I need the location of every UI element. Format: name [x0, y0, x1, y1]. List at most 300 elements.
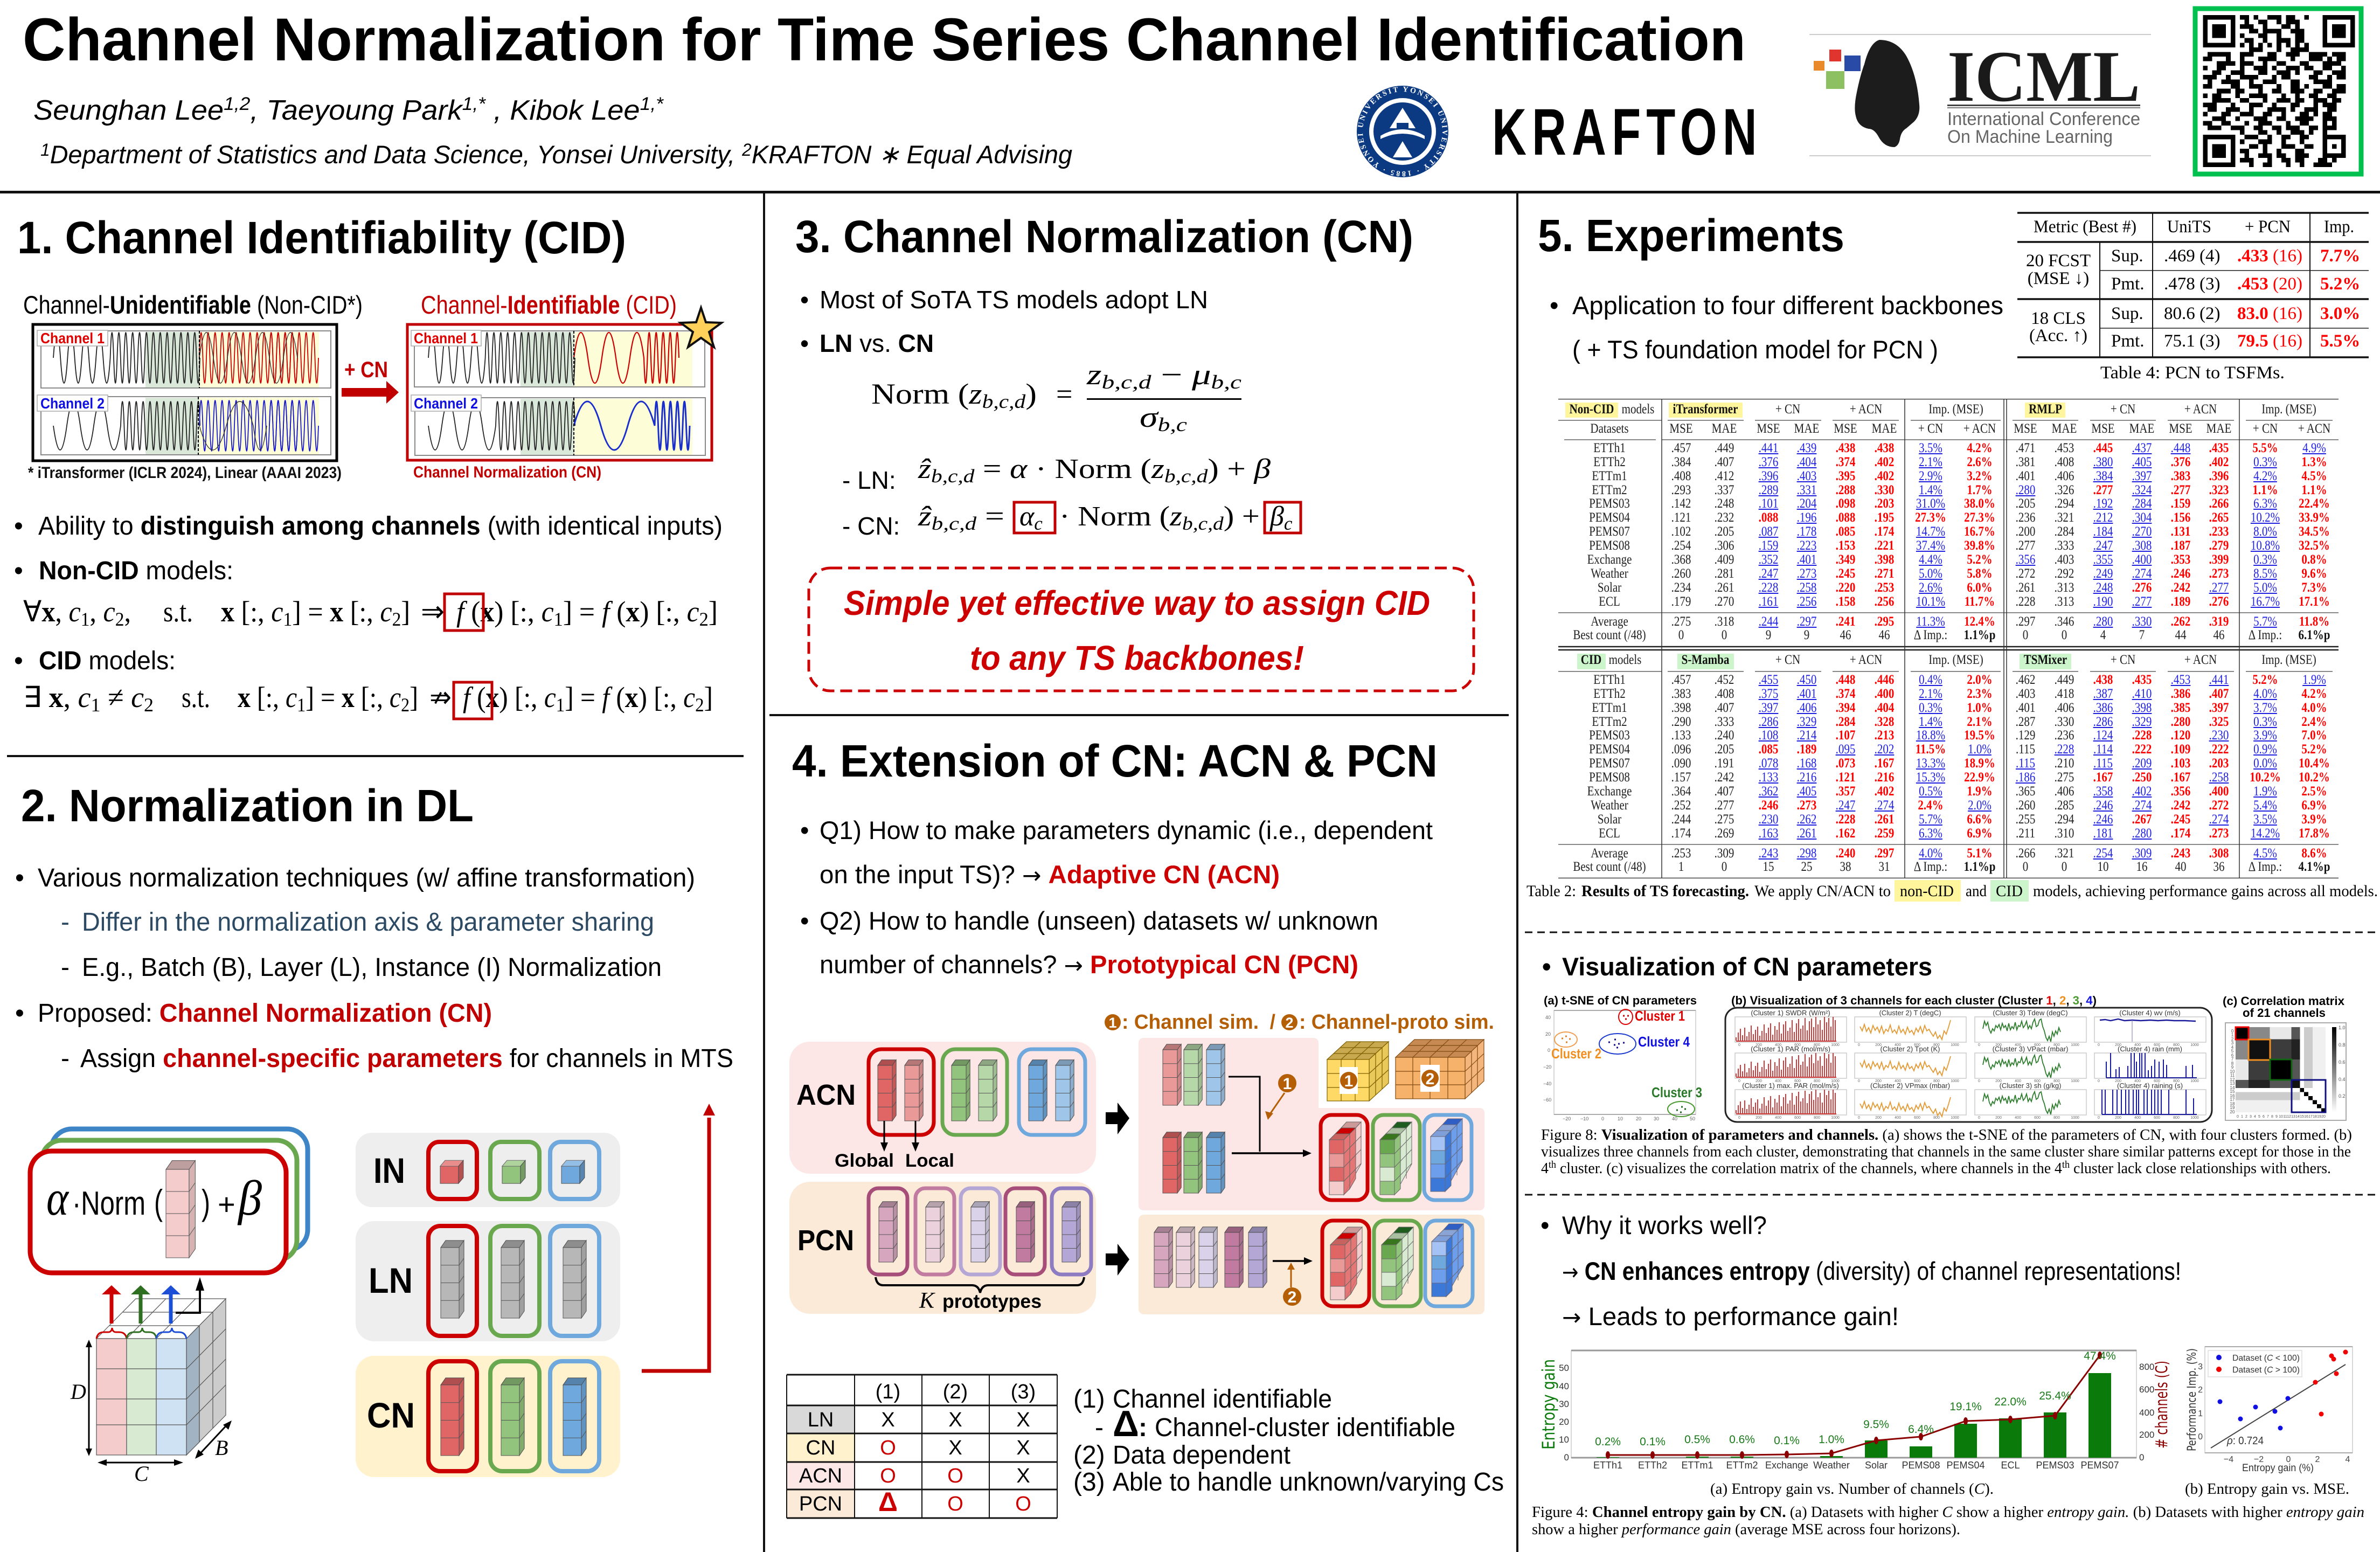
- CID data rows: .157: [1671, 770, 1691, 785]
- CID data rows: .321: [2055, 846, 2074, 861]
- chart: entropy gain vs channels: ETTh2: [1638, 1460, 1667, 1471]
- caption: table 2: non-CID: [1900, 882, 1954, 900]
- chart: entropy gain vs channels: 800: [2139, 1362, 2154, 1372]
- formula: LN: α · Norm ( z: [1010, 454, 1162, 484]
- heading 1: 1. Channel Identifiability (CID): [17, 212, 626, 263]
- formula: CID: ≠: [100, 681, 131, 713]
- affiliations: Department of Statistics and Data Science, Yonsei University,: [50, 140, 742, 169]
- formula: Norm: ): [1025, 378, 1037, 410]
- bullet: various techniques: Various normalization techniques (w/ affine transformation): [38, 864, 695, 892]
- CID data rows: 18.8%: [1916, 728, 1945, 743]
- chart: non-CID waveforms: Channel 2: [40, 395, 105, 412]
- non-CID data rows: PEMS04: [1589, 510, 1630, 525]
- CID data rows: .455: [1759, 673, 1778, 687]
- formula: CN: [918, 501, 1301, 534]
- non-CID data rows: .352: [1759, 552, 1778, 567]
- CID data rows: .242: [1715, 770, 1734, 785]
- non-CID data rows: 17.1%: [2299, 594, 2330, 609]
- CID data rows: .203: [2209, 756, 2229, 771]
- non-CID data rows: .368: [1671, 552, 1691, 567]
- CID data rows: .404: [1875, 701, 1894, 715]
- CID data rows: .410: [2132, 687, 2152, 701]
- CID data rows: .438: [2093, 673, 2113, 687]
- legend: similarity: [1105, 1011, 1494, 1034]
- heading 4: 4. Extension of CN: ACN & PCN: [792, 736, 1438, 786]
- CID data rows: .298: [1797, 846, 1816, 861]
- CID data rows: .401: [2016, 701, 2035, 715]
- formula: Norm: b,c,d: [982, 391, 1026, 412]
- non-CID data rows: 3.5%: [1919, 441, 1942, 455]
- CID data rows: .405: [1797, 784, 1816, 799]
- non-CID data rows: .384: [1671, 455, 1691, 469]
- sub-header row: MSE: [2014, 421, 2037, 436]
- non-CID data rows: .288: [1836, 483, 1855, 497]
- non-CID data rows: .277: [2016, 538, 2035, 553]
- CID data rows: .096: [1671, 742, 1691, 757]
- logo: ICML: [1809, 34, 2151, 156]
- table: method comparison: X: [881, 1409, 895, 1431]
- non-CID data rows: 11.7%: [1965, 594, 1995, 609]
- non-CID data rows: .190: [2093, 594, 2113, 609]
- non-CID data rows: .253: [1875, 580, 1894, 595]
- non-CID data rows: 10.2%: [2251, 510, 2280, 525]
- CID data rows: .274: [2132, 798, 2152, 813]
- chart: entropy gain vs MSE scatter: Dataset (C < 100): [2232, 1354, 2300, 1363]
- CID data rows: .109: [2171, 742, 2190, 757]
- CID data rows: .211: [2016, 826, 2035, 841]
- non-CID data rows: .262: [2171, 614, 2190, 629]
- bullet: why it works: Why it works well?: [1562, 1211, 1767, 1239]
- label: CID: Channel-Identifiable (CID): [421, 290, 677, 319]
- CID data rows: .273: [1797, 798, 1816, 813]
- legend: comparison criteria: -: [1095, 1414, 1104, 1442]
- chart: channels by cluster: (Cluster 4) raining (s): [2117, 1082, 2183, 1090]
- CID data rows: .280: [2132, 826, 2152, 841]
- table: method comparison: LN: [808, 1409, 834, 1431]
- bullet: why it works: •: [1541, 1211, 1549, 1239]
- non-CID data rows: .381: [2016, 455, 2035, 469]
- non-CID data rows: ETTm2: [1592, 483, 1627, 497]
- CID data rows: 2.0%: [1968, 798, 1992, 813]
- CID data rows: .329: [2132, 715, 2152, 729]
- non-CID data rows: 2.1%: [1919, 455, 1942, 469]
- chart: correlation matrix: 14: [2230, 1085, 2235, 1090]
- non-CID data rows: 6.0%: [1967, 580, 1993, 595]
- non-CID data rows: .234: [1671, 580, 1691, 595]
- chart: entropy gain vs channels: 1.0%: [1819, 1433, 1844, 1446]
- CID data rows: PEMS04: [1589, 742, 1630, 757]
- chart: entropy gain vs channels: 0: [2139, 1452, 2144, 1463]
- panel: PCN: [789, 1182, 1096, 1314]
- CID data rows: .448: [1836, 673, 1855, 687]
- CID data rows: Best count (/48): [1573, 860, 1646, 874]
- non-CID data rows: .258: [1797, 580, 1816, 595]
- table 4: + PCN: [2245, 217, 2291, 237]
- chart: correlation matrix: 15: [2300, 1115, 2304, 1119]
- formula: non-CID: 1: [554, 608, 563, 630]
- panel: IN: IN: [373, 1151, 405, 1190]
- formula: non-CID: ∀x, c: [23, 595, 81, 628]
- formula: CID: 1: [91, 694, 100, 716]
- non-CID data rows: .273: [1797, 566, 1816, 581]
- non-CID data rows: Exchange: [1587, 552, 1632, 567]
- header groups: CID: + CN: [2111, 653, 2135, 667]
- cube dimension labels: D: [70, 1380, 86, 1404]
- non-CID data rows: .408: [2055, 455, 2074, 469]
- footnote: CN: Channel Normalization (CN): [413, 463, 601, 481]
- table: method comparison: X: [948, 1437, 962, 1459]
- CID data rows: .450: [1797, 673, 1816, 687]
- non-CID data rows: Weather: [1591, 566, 1628, 581]
- CID data rows: 25: [1801, 860, 1813, 874]
- formula: Norm: b,c: [1211, 371, 1241, 393]
- panel: LN: [356, 1221, 620, 1341]
- chart: correlation matrix: 12: [2230, 1077, 2235, 1082]
- non-CID data rows: 46: [1878, 628, 1890, 642]
- chart: t-SNE: 30: [1654, 1116, 1659, 1121]
- header groups: CID: [1581, 653, 2316, 667]
- CID data rows: Weather: [1591, 798, 1628, 813]
- chart: t-SNE: 40: [1545, 1015, 1551, 1020]
- non-CID data rows: 2.9%: [1919, 469, 1942, 483]
- non-CID data rows: PEMS08: [1589, 538, 1630, 553]
- formula: CID: ] =: [565, 681, 602, 713]
- footnote: non-CID models: * iTransformer (ICLR 2024), Linear (AAAI 2023): [28, 464, 342, 482]
- table 2: results of TS forecasting: [1558, 399, 2339, 878]
- chart: entropy gain vs channels: 6.4%: [1908, 1423, 1934, 1436]
- formula: CID: s.t.: [182, 681, 210, 713]
- formula: non-CID: f (x) [:, c: [456, 595, 554, 628]
- table 4: .469 (4): [2164, 246, 2220, 266]
- sub-bullet: assign parameters: Assign channel-specific parameters for channels in MTS: [80, 1044, 733, 1073]
- caption: figure 4: Figure 4: Channel entropy gain by CN. (a) Datasets with higher C show a higher entropy gain. (b) Datasets with higher entropy gain: [1532, 1504, 2364, 1521]
- non-CID data rows: .276: [2132, 580, 2152, 595]
- CID data rows: .167: [2093, 770, 2113, 785]
- non-CID data rows: .187: [2171, 538, 2190, 553]
- chart: correlation matrix: 12: [2287, 1115, 2291, 1119]
- bullet: LN vs CN: LN: [820, 329, 852, 357]
- sub-header row: MSE: [1669, 421, 1693, 436]
- chart: entropy gain vs channels: Weather: [1813, 1460, 1850, 1471]
- bullet: proposed: Proposed: Channel Normalization (CN): [38, 999, 492, 1028]
- CID data rows: 4.0%: [1919, 846, 1942, 861]
- non-CID data rows: .297: [2016, 614, 2035, 629]
- legend: similarity: : Channel sim. /: [1122, 1011, 1275, 1034]
- formula: CN: · Norm ( z: [1059, 501, 1181, 532]
- bullet: LN vs CN: •: [800, 329, 809, 357]
- panel: ACN: Local: [905, 1151, 954, 1171]
- non-CID data rows: .203: [1875, 496, 1894, 511]
- chart: correlation matrix: 14: [2295, 1115, 2300, 1119]
- non-CID data rows: 5.7%: [2253, 614, 2277, 629]
- non-CID data rows: 38.0%: [1964, 496, 1995, 511]
- CID data rows: .400: [2209, 784, 2229, 799]
- CID data rows: 2.4%: [2301, 715, 2327, 729]
- authors: , Taeyoung Park: [250, 95, 464, 126]
- chart: t-SNE: −20: [1563, 1116, 1571, 1121]
- chart: correlation matrix: of 21 channels: [2243, 1006, 2326, 1020]
- bullet: Q2: •: [800, 906, 809, 935]
- chart: correlation matrix: 20: [2321, 1115, 2326, 1119]
- header groups: CID: Imp. (MSE): [1928, 653, 1983, 667]
- chart: CID waveforms: Channel 1: [414, 330, 478, 347]
- CID data rows: 2.0%: [1967, 673, 1993, 687]
- CID data rows: .397: [1759, 701, 1778, 715]
- CID data rows: .216: [1875, 770, 1894, 785]
- CID data rows: .262: [1797, 812, 1816, 827]
- formula: CID: •: [14, 647, 23, 675]
- CID data rows: .213: [1875, 728, 1894, 743]
- legend: comparison criteria: Data dependent: [1113, 1441, 1290, 1470]
- CID data rows: .124: [2093, 728, 2113, 743]
- chart: entropy gain vs MSE scatter: 3: [2198, 1362, 2203, 1371]
- arrow: ACN to detail: [1106, 1103, 1129, 1134]
- non-CID data rows: 4.2%: [2253, 469, 2277, 483]
- CID data rows: .297: [1875, 846, 1894, 861]
- chart: entropy gain vs channels: 20: [1559, 1417, 1569, 1427]
- non-CID data rows: .274: [2132, 566, 2152, 581]
- chart: correlation matrix: 4: [2231, 1045, 2234, 1050]
- cube dimension labels: C: [134, 1461, 149, 1486]
- chart: t-SNE: 20: [1545, 1031, 1551, 1037]
- chart: correlation matrix: 0.4: [2339, 1077, 2346, 1082]
- non-CID data rows: .277: [2093, 483, 2113, 497]
- non-CID data rows: 11.3%: [1916, 614, 1945, 629]
- bullet: CID models: CID models:: [39, 647, 176, 675]
- legend: comparison criteria: (3): [1073, 1468, 1105, 1496]
- non-CID data rows: 1.3%: [2301, 455, 2327, 469]
- formula: non-CID: f (x) [:, c: [602, 595, 700, 628]
- CID data rows: 15: [1763, 860, 1774, 874]
- bullet: backbones: •: [1550, 291, 1558, 320]
- label: LN: - LN:: [842, 466, 896, 494]
- table 4: (MSE ↓): [2028, 269, 2089, 288]
- non-CID data rows: .445: [2093, 441, 2113, 455]
- non-CID data rows: .294: [2055, 496, 2074, 511]
- CID data rows: .260: [2016, 798, 2035, 813]
- non-CID data rows: .353: [2171, 552, 2190, 567]
- table: method comparison: PCN: [799, 1493, 842, 1515]
- header groups: CID: S-Mamba: [1682, 653, 1729, 667]
- caption: figure 4: show a higher performance gain (average MSE across four horizons).: [1532, 1521, 1960, 1538]
- non-CID data rows: .441: [1759, 441, 1778, 455]
- chart: entropy gain vs MSE scatter: 4: [2346, 1455, 2350, 1464]
- non-CID data rows: .396: [2209, 469, 2229, 483]
- CID data rows: .285: [2055, 798, 2074, 813]
- CID data rows: .259: [1875, 826, 1894, 841]
- non-CID data rows: 7.3%: [2301, 580, 2327, 595]
- CID data rows: .310: [2055, 826, 2074, 841]
- non-CID data rows: .102: [1671, 524, 1691, 539]
- CID data rows: 10: [2097, 860, 2109, 874]
- non-CID data rows: .448: [2171, 441, 2190, 455]
- CID data rows: .202: [1875, 742, 1894, 757]
- CID data rows: 2.1%: [1919, 687, 1942, 701]
- non-CID data rows: 0: [2023, 628, 2028, 642]
- non-CID data rows: 27.3%: [1964, 510, 1995, 525]
- sub-header row: MSE: [2091, 421, 2115, 436]
- CID data rows: 1.4%: [1919, 715, 1942, 729]
- non-CID data rows: .457: [1671, 441, 1691, 455]
- affiliations: 1: [40, 140, 50, 160]
- non-CID data rows: 6.1%p: [2299, 628, 2330, 642]
- chart: channels by cluster: (Cluster 4) wv (m/s): [2119, 1009, 2181, 1017]
- chart: channels by cluster: (Cluster 2) T (degC): [1879, 1009, 1941, 1017]
- chart: correlation matrix: 8: [2231, 1061, 2234, 1066]
- non-CID data rows: .284: [2132, 496, 2152, 511]
- heading: visualization of CN parameters: Visualization of CN parameters: [1562, 952, 1932, 981]
- non-CID data rows: Δ Imp.:: [2249, 628, 2282, 642]
- CID data rows: 17.8%: [2299, 826, 2330, 841]
- non-CID data rows: .244: [1759, 614, 1778, 629]
- non-CID data rows: .402: [1875, 469, 1894, 483]
- CID data rows: .073: [1836, 756, 1855, 771]
- sub-header row: MSE: [1757, 421, 1780, 436]
- legend: comparison criteria: [1073, 1385, 1504, 1496]
- CID data rows: .243: [1759, 846, 1778, 861]
- bullet: non-CID models: Non-CID models:: [39, 557, 233, 585]
- chart: correlation matrix: 5: [2258, 1115, 2260, 1119]
- non-CID data rows: 9: [1804, 628, 1809, 642]
- non-CID data rows: 4.9%: [2302, 441, 2326, 455]
- CID data rows: .129: [2016, 728, 2035, 743]
- non-CID data rows: .161: [1759, 594, 1778, 609]
- non-CID data rows: .121: [1671, 510, 1691, 525]
- CID data rows: .133: [1759, 770, 1778, 785]
- heading 3: 3. Channel Normalization (CN): [795, 211, 1413, 262]
- chart: correlation matrix: 11: [2230, 1073, 2235, 1078]
- label: CN: - CN:: [842, 512, 900, 540]
- table 4: Sup.: [2111, 246, 2143, 266]
- non-CID data rows: .399: [2209, 552, 2229, 567]
- chart: t-SNE: 0: [1548, 1048, 1550, 1053]
- non-CID data rows: 12.4%: [1964, 614, 1995, 629]
- bullet: various techniques: •: [15, 864, 24, 892]
- non-CID data rows: .249: [2093, 566, 2113, 581]
- non-CID data rows: .453: [2055, 441, 2074, 455]
- chart: non-CID waveforms: Channel 1: [40, 330, 105, 347]
- legend: comparison criteria: Channel-cluster identifiable: [1155, 1414, 1455, 1442]
- CID data rows: .418: [2055, 687, 2074, 701]
- chart: t-SNE: 0: [1601, 1116, 1604, 1121]
- CID data rows: .308: [2209, 846, 2229, 861]
- CID data rows: .162: [1836, 826, 1855, 841]
- CID data rows: PEMS07: [1589, 756, 1630, 771]
- non-CID data rows: .179: [1671, 594, 1691, 609]
- non-CID data rows: .409: [1715, 552, 1734, 567]
- formula: non-CID: ⇒: [421, 595, 445, 628]
- CID data rows: .174: [1671, 826, 1691, 841]
- sub-bullet: examples: -: [61, 953, 70, 982]
- bullet dot: proposed: •: [15, 999, 24, 1028]
- formula: non-CID: ,: [124, 595, 131, 628]
- CID data rows: 22.9%: [1964, 770, 1995, 785]
- table: method comparison: O: [880, 1465, 896, 1487]
- non-CID data rows: .437: [2132, 441, 2152, 455]
- logo: KRAFTON: KRAFTON: [1492, 95, 1763, 169]
- non-CID data rows: .333: [2055, 538, 2074, 553]
- table: method comparison: X: [1016, 1465, 1030, 1487]
- caption: subfigure a: (a) Entropy gain vs. Number of channels (C).: [1710, 1480, 1994, 1498]
- chart: correlation matrix: 3: [2250, 1115, 2252, 1119]
- header groups: non-CID: iTransformer: [1673, 402, 1738, 417]
- CID data rows: 40: [2175, 860, 2187, 874]
- non-CID data rows: .331: [1797, 483, 1816, 497]
- sub-header row: MSE: [1834, 421, 1857, 436]
- chart: entropy gain vs MSE scatter: [2185, 1347, 2353, 1474]
- arrow: + CN: + CN: [344, 357, 388, 382]
- non-CID data rows: .266: [2209, 496, 2229, 511]
- diagram: norm cards: [30, 1129, 308, 1273]
- formula: non-CID: 2: [699, 608, 709, 630]
- chart: entropy gain vs MSE scatter: Dataset (C > 100): [2232, 1366, 2300, 1375]
- non-CID data rows: [1573, 441, 2330, 642]
- caption: table 4: Table 4: PCN to TSFMs.: [2100, 363, 2285, 383]
- legend: similarity: : Channel-proto sim.: [1299, 1011, 1494, 1034]
- CID data rows: .191: [1715, 756, 1734, 771]
- bullet: backbones: Application to four different backbones: [1572, 291, 2003, 320]
- callout: simple yet effective: [809, 568, 1474, 691]
- non-CID data rows: .355: [2093, 552, 2113, 567]
- non-CID data rows: .241: [1836, 614, 1855, 629]
- non-CID data rows: .402: [2209, 455, 2229, 469]
- CID data rows: 7.0%: [2301, 728, 2327, 743]
- formula: CN: b,c,d: [932, 513, 977, 534]
- formula: CID: 1: [297, 694, 306, 716]
- CID data rows: 6.9%: [2301, 798, 2327, 813]
- CID data rows: 0: [2062, 860, 2067, 874]
- non-CID data rows: .349: [1836, 552, 1855, 567]
- chart: entropy gain vs MSE scatter: Entropy gain (%): [2242, 1463, 2314, 1474]
- CID data rows: .333: [1715, 715, 1734, 729]
- table 4: Imp.: [2324, 217, 2354, 237]
- panel: PCN detail: [1139, 1215, 1484, 1314]
- CID data rows: .441: [2209, 673, 2229, 687]
- title: Channel Normalization for Time Series Channel Identification: [23, 6, 1746, 73]
- non-CID data rows: 8.5%: [2253, 566, 2277, 581]
- chart: correlation matrix: 10: [2230, 1069, 2235, 1074]
- non-CID data rows: 11.8%: [2299, 614, 2329, 629]
- CID data rows: .401: [1797, 687, 1816, 701]
- CID data rows: .274: [1875, 798, 1894, 813]
- non-CID data rows: .408: [1671, 469, 1691, 483]
- formula: CN: =: [976, 501, 1004, 532]
- chart: correlation matrix: 1: [2231, 1033, 2234, 1037]
- diagram: norm cards: +: [218, 1187, 235, 1221]
- sub-header row: MSE: [2169, 421, 2192, 436]
- panel: ACN detail: [1139, 1038, 1484, 1210]
- CID data rows: .397: [2209, 701, 2229, 715]
- chart: correlation matrix: 13: [2230, 1081, 2235, 1086]
- non-CID data rows: .159: [2171, 496, 2190, 511]
- CID data rows: .358: [2093, 784, 2113, 799]
- CID data rows: 6.9%: [1967, 826, 1993, 841]
- CID data rows: .250: [2132, 770, 2152, 785]
- CID data rows: .274: [2209, 812, 2229, 827]
- non-CID data rows: .407: [1715, 455, 1734, 469]
- caption: table 2: We apply CN/ACN to: [1754, 882, 1891, 900]
- non-CID data rows: .337: [1715, 483, 1734, 497]
- CID data rows: .228: [2055, 742, 2074, 757]
- chart: entropy gain vs channels: ETTm1: [1681, 1460, 1713, 1471]
- CID data rows: .386: [2093, 701, 2113, 715]
- text: performance gain: → Leads to performance gain!: [1562, 1302, 1899, 1331]
- legend: similarity: 2: [1285, 1015, 1294, 1031]
- non-CID data rows: .313: [2055, 594, 2074, 609]
- chart: entropy gain vs channels: # channels (C): [2153, 1361, 2171, 1449]
- bullet: LN vs CN: vs. CN: [859, 329, 934, 357]
- heading 5: 5. Experiments: [1538, 210, 1844, 261]
